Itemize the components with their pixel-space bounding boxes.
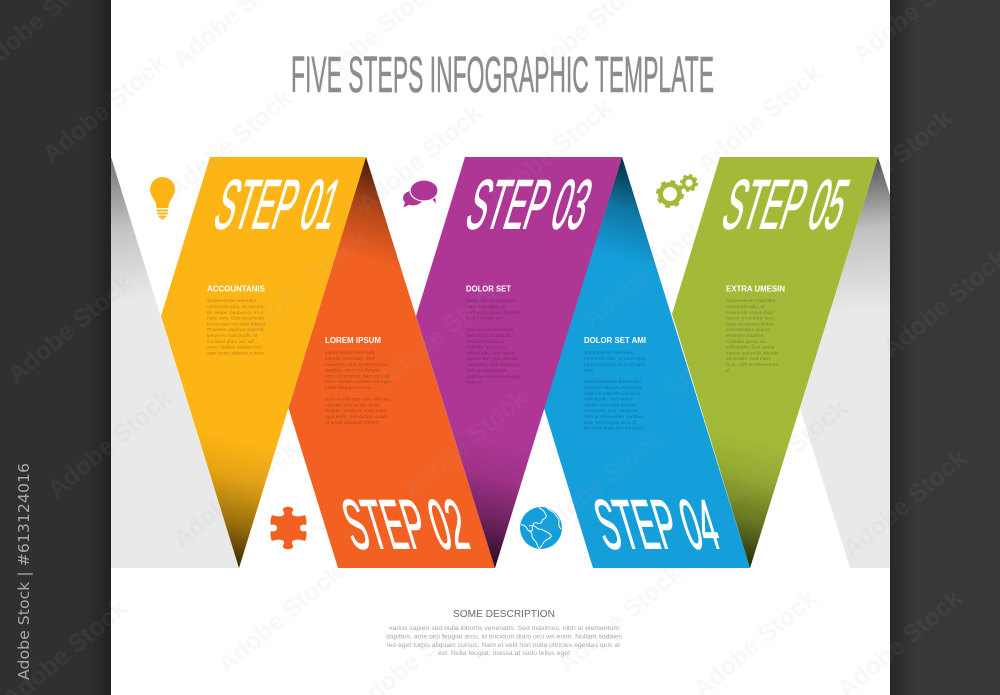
fold shadow: yellow bottom bbox=[161, 157, 366, 568]
icon: puzzle piece bbox=[270, 507, 307, 549]
step 03 body text: sapien sed nulla lobortis bbox=[466, 356, 519, 362]
step 04 body text: nibh at elementum dapibus, bbox=[584, 414, 644, 420]
step 03 body text bbox=[466, 298, 521, 386]
heading: some description: SOME DESCRIPTION bbox=[453, 609, 555, 620]
step 03 body text: Duis accumsan lectus bbox=[466, 327, 514, 333]
panel: step 04 blue bbox=[544, 157, 750, 568]
step 03 body text: Suspendisse imperdiet bbox=[466, 298, 516, 304]
step 01 body text: Suspendisse imperdiet bbox=[207, 298, 257, 304]
panel: step 01 yellow bbox=[161, 157, 366, 568]
step 04 body text: sollicitudin. Sed varius bbox=[584, 396, 633, 402]
watermark pattern: Adobe Stock bbox=[692, 59, 827, 179]
step 02 body text: enim. Nullam sodales leo eget bbox=[325, 379, 391, 385]
step 05 body text: venenatis. Sed maxi- bbox=[726, 356, 772, 362]
step 05 body text: d bbox=[726, 368, 729, 374]
panel: step 03 purple: STEP 03 bbox=[458, 166, 600, 244]
step 03 body text: commodo odio, at bbox=[466, 304, 506, 310]
step 02 body text: maximus, nibh at elementum bbox=[325, 362, 388, 368]
step 04 body text: ante orci feugiat arcu, id bbox=[584, 420, 636, 426]
step 02 body text: arcu, id tincidunt diam orci vel bbox=[325, 374, 389, 380]
step 02 body text bbox=[325, 350, 391, 426]
step 01 body text: enim. Nullam sodales leo bbox=[207, 344, 262, 350]
description text: leo eget turpis aliquam cursus. Nam et velit non nulla ultricies egestas quis at bbox=[387, 642, 620, 649]
step 03 body text: sollicitudin. Sed varius bbox=[466, 350, 515, 356]
step 03 body text: in. In ut nunc sem. bbox=[466, 316, 506, 322]
step 03 body text: commodo neque dapibus bbox=[466, 310, 521, 316]
watermark pattern: Adobe Stock bbox=[352, 99, 487, 219]
watermark pattern: Adobe Stock bbox=[42, 384, 177, 504]
white page panel bbox=[111, 0, 890, 695]
step 02 heading: LOREM IPSUM bbox=[325, 336, 381, 345]
step 02 body text: varius sapien sed nulla bbox=[325, 350, 375, 356]
step 05 body text: sed interdum aliquet. bbox=[726, 327, 771, 333]
panel: step 03 purple bbox=[416, 157, 622, 568]
step 05 body text: sapien sed nulla lobortis bbox=[726, 350, 779, 356]
step 03 body text: nibh at elementum bbox=[466, 368, 506, 374]
watermark pattern: Adobe Stock bbox=[37, 49, 172, 169]
panel: step 02 orange: STEP 02 bbox=[334, 486, 477, 564]
step 05 heading: EXTRA UMESIN bbox=[726, 284, 785, 294]
step 02 body text: ut turpis placerat consect bbox=[325, 420, 380, 426]
step 02 body text: eget enim. Sed dictum quam bbox=[325, 414, 387, 420]
step 04 heading: DOLOR SET AMI bbox=[584, 336, 646, 345]
step 04 body text bbox=[584, 350, 646, 432]
description text: dapibus, ante orci feugiat arcu, id tincidunt diam orci vel enim. Nullam sodales bbox=[386, 634, 622, 640]
icon: speech bubbles bbox=[403, 180, 438, 208]
step 05 body text: mus, nibh at elementum bbox=[726, 362, 778, 368]
step 04 body text: commodo odio, at commodo bbox=[584, 356, 646, 362]
icon: globe bbox=[520, 507, 562, 549]
fold shadow: orange top bbox=[288, 157, 495, 568]
step 03 body text: sed interdum aliquet. bbox=[466, 333, 511, 339]
step 03 body text: Praesent dapibus bbox=[466, 339, 505, 345]
step 04 body text: Suspendisse imperdiet bbox=[584, 350, 634, 356]
step 05 body text: commodo neque dapi- bbox=[726, 310, 775, 316]
fold shadow: purple bottom bbox=[416, 157, 622, 568]
step 05 body text: bus in. In ut nunc sem. bbox=[726, 316, 775, 322]
step 04 body text: venenatis. Sed maximus, bbox=[584, 408, 639, 414]
panel: step 02 orange bbox=[288, 157, 495, 568]
step 04 body text: sapien sed nulla lobortis bbox=[584, 402, 637, 408]
watermark pattern: Adobe Stock bbox=[162, 84, 297, 204]
step 02 body text: egestas quis at est. Nulla bbox=[325, 402, 380, 408]
fold shadow: green bottom bbox=[672, 157, 878, 568]
watermark pattern: Adobe Stock bbox=[397, 384, 532, 504]
step 01 body text: lectus sed interdum aliquet. bbox=[207, 322, 267, 328]
step 04 body text: neque dapibus in. In ut nunc bbox=[584, 362, 646, 368]
panel: step 04 blue: STEP 04 bbox=[586, 486, 728, 564]
panel: step 05 green bbox=[672, 157, 878, 568]
step 05 body text: Duis accumsan lectus bbox=[726, 322, 774, 328]
step 05 body text bbox=[726, 298, 779, 374]
step 05 body text: Suspendisse imperdiet bbox=[726, 298, 776, 304]
step 05 body text: molestie ipsum eu bbox=[726, 339, 766, 345]
step 02 body text: turpis aliquam cursus. bbox=[325, 385, 373, 391]
icon: gears bbox=[658, 175, 697, 206]
step 01 body text: ipsum eu sollicitudin, id bbox=[207, 333, 258, 339]
step 03 body text: dapibus, ante orci feugiat bbox=[466, 374, 521, 380]
step 02 body text: lobortis venenatis. Sed bbox=[325, 356, 375, 362]
watermark pattern: Adobe Stock bbox=[212, 559, 347, 679]
watermark pattern: Adobe Stock bbox=[837, 444, 972, 564]
step 04 body text: tincidunt diam orci vel enim. bbox=[584, 426, 644, 432]
watermark pattern: Adobe Stock bbox=[167, 434, 302, 554]
step 05 body text: Praesent dapibus bbox=[726, 333, 765, 339]
step 01 body text: tincidunt diam orci vel bbox=[207, 339, 254, 345]
panel: step 01 yellow: STEP 01 bbox=[206, 166, 349, 244]
right grey fold bbox=[800, 157, 890, 568]
step 03 body text: molestie ipsum eu bbox=[466, 344, 506, 350]
step 05 body text: commodo odio, at bbox=[726, 304, 766, 310]
step 01 body text: Praesent dapibus molestie bbox=[207, 327, 265, 333]
watermark pattern: Adobe Stock bbox=[482, 94, 617, 214]
side caption: Adobe Stock | #613124016 bbox=[15, 463, 33, 680]
watermark pattern: Adobe Stock bbox=[372, 274, 507, 394]
watermark pattern: Adobe Stock bbox=[822, 104, 957, 224]
step 01 body text: commodo odio, at commo- bbox=[207, 304, 265, 310]
step 01 body text bbox=[207, 298, 267, 356]
left grey fold bbox=[111, 157, 239, 568]
step 03 body text: arcu, id bbox=[466, 380, 482, 386]
step 04 body text: dapibus molestie ipsum eu bbox=[584, 391, 642, 397]
step 01 body text: nunc sem. Duis accumsan bbox=[207, 316, 265, 322]
step 01 heading: ACCOUNTANIS bbox=[207, 284, 266, 294]
watermark pattern: Adobe Stock bbox=[237, 224, 372, 344]
icon: light bulb bbox=[150, 177, 175, 219]
description text bbox=[386, 625, 622, 657]
watermark pattern: Adobe Stock bbox=[532, 424, 667, 544]
step 01 body text: do neque dapibus in. In ut bbox=[207, 310, 264, 316]
step 04 body text: interdum aliquet. Praesent bbox=[584, 385, 642, 391]
step 03 heading: DOLOR SET bbox=[466, 284, 511, 294]
watermark pattern: Adobe Stock bbox=[552, 559, 687, 679]
step 04 body text: sem. bbox=[584, 368, 595, 374]
fold shadow: blue top bbox=[544, 157, 750, 568]
description text: est. Nulla feugiat, massa at sodo tellus eget bbox=[438, 650, 570, 657]
watermark pattern: Adobe Stock bbox=[2, 269, 137, 389]
watermark pattern: Adobe Stock bbox=[657, 284, 792, 404]
step 02 body text: dapibus, ante orci feugiat bbox=[325, 368, 380, 374]
step 03 body text: venenatis. Sed maximus, bbox=[466, 362, 521, 368]
step 01 body text: eget turpis aliquam cursus. bbox=[207, 350, 265, 356]
step 02 body text: Nam et velit non nulla ultricies bbox=[325, 396, 391, 402]
step 02 body text: feugiat, massa at sodo tellus bbox=[325, 408, 388, 414]
step 04 body text: Duis accumsan lectus sed bbox=[584, 379, 641, 385]
watermark pattern: Adobe Stock bbox=[577, 214, 712, 334]
description text: varius sapien sed nulla lobortis venenatis. Sed maximus, nibh at elementum bbox=[389, 625, 619, 632]
watermark pattern: Adobe Stock bbox=[717, 394, 852, 514]
step 05 body text: sollicitudin. Sed varius bbox=[726, 344, 775, 350]
